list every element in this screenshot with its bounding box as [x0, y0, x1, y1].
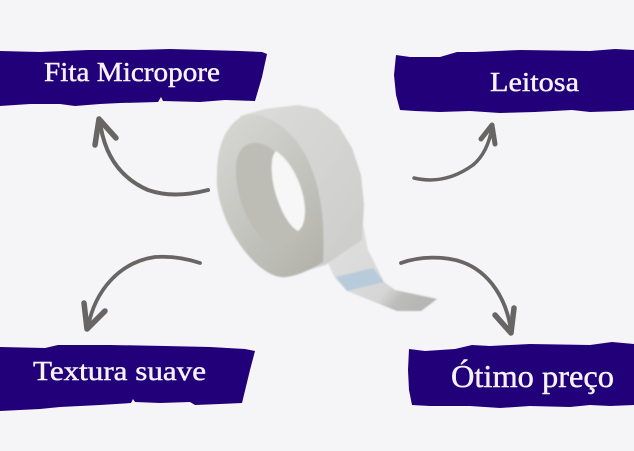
inner wall of hole: [236, 143, 306, 247]
arrow: to Leitosa: [414, 125, 495, 180]
hole opening: [272, 151, 305, 231]
label: Fita Micropore: Fita Micropore: [44, 57, 220, 87]
banner: Textura suave: [0, 345, 255, 411]
arrow: to Textura suave: [84, 257, 200, 329]
roll front face: [217, 114, 324, 277]
label: Leitosa: Leitosa: [490, 67, 579, 97]
blue band on strip: [336, 268, 384, 291]
arrow: to Fita Micropore: [95, 119, 208, 194]
tape strip: [322, 220, 437, 311]
label: Textura suave: Textura suave: [33, 356, 206, 386]
banner: Ótimo preço: [408, 342, 634, 408]
label: Ótimo preço: Ótimo preço: [451, 358, 614, 394]
arrow: to Ótimo preço: [401, 258, 514, 333]
banner: Fita Micropore: [0, 49, 267, 106]
illustration: micropore tape roll: [217, 105, 437, 311]
roll outer side: [240, 105, 364, 277]
banner: Leitosa: [394, 49, 634, 113]
